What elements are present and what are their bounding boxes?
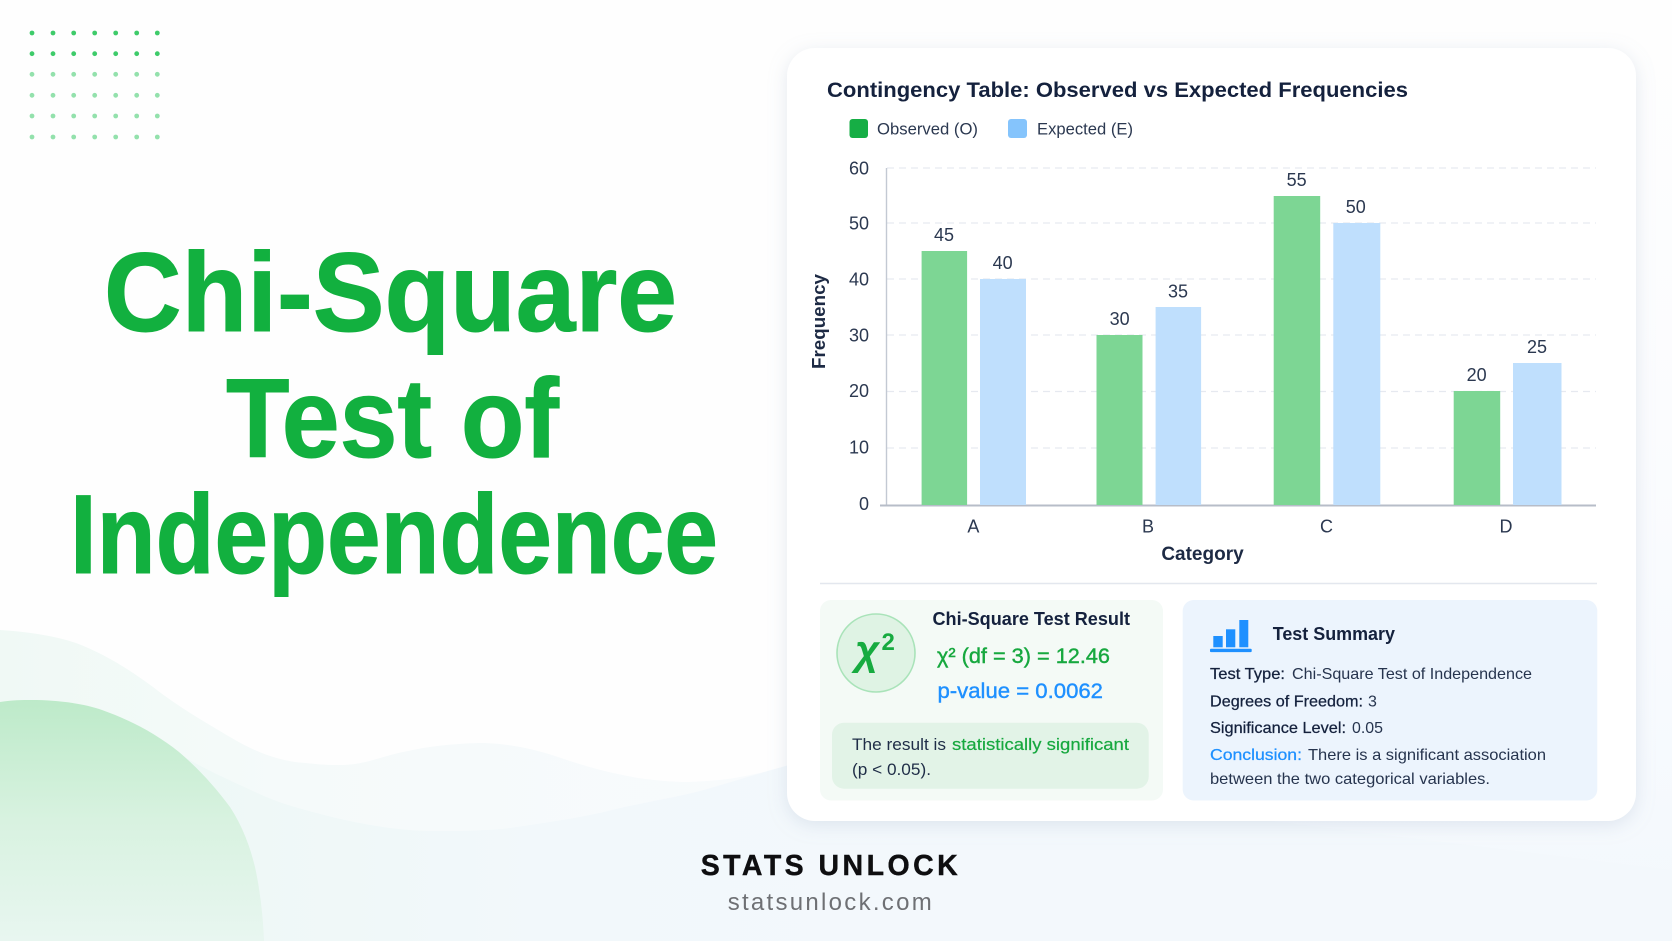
category labels xyxy=(967,516,1512,536)
icon: chi-square badge: 2 xyxy=(882,629,895,656)
panel: test summary xyxy=(1183,600,1597,800)
y axis: 60 xyxy=(849,158,869,178)
bar chart xyxy=(809,158,1596,565)
expected bars xyxy=(980,223,1562,505)
value labels: 45 xyxy=(934,225,954,245)
summary details: Degrees of Freedom: xyxy=(1210,693,1363,710)
background wave: pale upper band xyxy=(0,630,800,941)
summary heading: Test Summary xyxy=(1273,624,1395,644)
title: Independence xyxy=(70,472,718,597)
value labels xyxy=(934,170,1547,385)
category labels: A xyxy=(967,516,979,536)
summary details: 3 xyxy=(1368,693,1377,710)
summary details: Chi-Square Test of Independence xyxy=(1292,666,1532,683)
panel: main card xyxy=(787,48,1636,821)
y axis xyxy=(849,158,886,514)
significance callout: (p < 0.05). xyxy=(852,760,931,779)
y axis: 40 xyxy=(849,270,869,290)
icon: chi-square badge xyxy=(837,614,915,692)
x axis title: Category xyxy=(1161,544,1244,565)
category labels: C xyxy=(1320,516,1333,536)
title: Test of xyxy=(226,356,560,481)
value labels: 50 xyxy=(1346,197,1366,217)
observed bars xyxy=(922,196,1500,505)
dot grid decoration xyxy=(30,31,160,139)
value labels: 20 xyxy=(1467,365,1487,385)
brand footer xyxy=(701,850,958,916)
y axis: 10 xyxy=(849,438,869,458)
legend: Expected (E) xyxy=(1037,120,1133,138)
y axis: 50 xyxy=(849,214,869,234)
significance callout xyxy=(832,723,1149,789)
brand footer: statsunlock.com xyxy=(728,889,932,916)
title xyxy=(70,230,718,597)
category labels: B xyxy=(1142,516,1154,536)
significance callout: statistically significant xyxy=(952,735,1129,754)
chi-square statistic: χ² (df = 3) = 12.46 xyxy=(937,645,1110,668)
value labels: 35 xyxy=(1168,282,1188,302)
summary details: Conclusion: xyxy=(1210,747,1302,764)
value labels: 40 xyxy=(993,253,1013,273)
value labels: 25 xyxy=(1527,337,1547,357)
result heading: Chi-Square Test Result xyxy=(932,608,1130,629)
significance callout: The result is xyxy=(852,735,946,754)
background wave: blue lower band xyxy=(0,748,1672,941)
y axis: 30 xyxy=(849,326,869,346)
summary details xyxy=(1210,666,1546,788)
panel: chi-square test result xyxy=(820,600,1163,800)
summary details: 0.05 xyxy=(1352,720,1383,737)
summary details: There is a significant association xyxy=(1308,747,1546,764)
y axis: 0 xyxy=(859,494,869,514)
legend: Observed (O) xyxy=(877,120,978,138)
icon: chi-square badge: χ xyxy=(851,626,881,674)
legend xyxy=(850,119,1133,138)
p-value: p-value = 0.0062 xyxy=(938,680,1103,703)
value labels: 55 xyxy=(1287,170,1307,190)
y axis title: Frequency xyxy=(809,274,829,369)
title: Chi-Square xyxy=(104,230,677,355)
summary details: Test Type: xyxy=(1210,666,1285,683)
chart heading: Contingency Table: Observed vs Expected Frequencies xyxy=(827,78,1408,102)
y axis: 20 xyxy=(849,381,869,401)
brand footer: STATS UNLOCK xyxy=(701,850,958,882)
category labels: D xyxy=(1500,516,1512,536)
summary details: between the two categorical variables. xyxy=(1210,771,1490,788)
summary details: Significance Level: xyxy=(1210,720,1346,737)
icon: bar chart xyxy=(1210,620,1252,652)
x axis xyxy=(880,504,1596,506)
background blob: green circle xyxy=(0,700,264,941)
value labels: 30 xyxy=(1110,309,1130,329)
